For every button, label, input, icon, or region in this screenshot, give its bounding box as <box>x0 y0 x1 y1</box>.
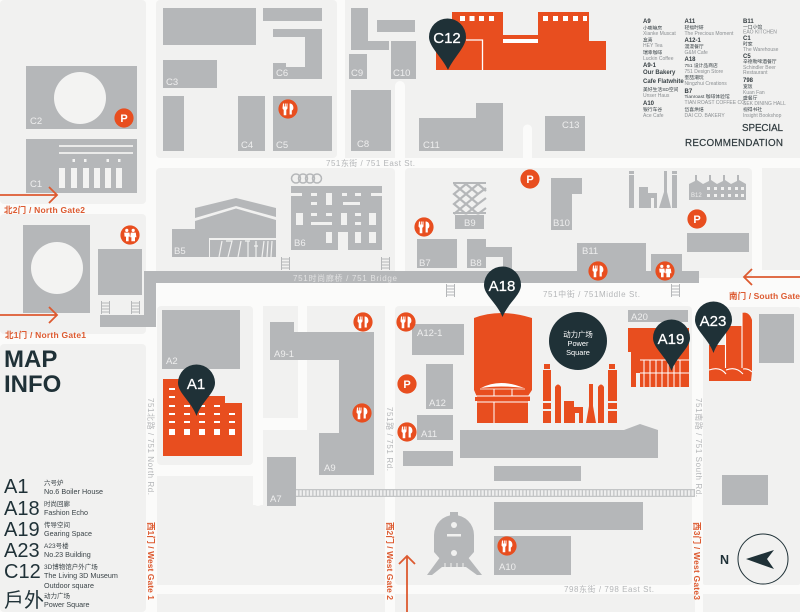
stairs <box>102 257 680 314</box>
pin: A23: A23 <box>700 313 726 330</box>
building C5: C5 <box>276 140 288 151</box>
east building <box>759 314 794 363</box>
column 2: A18 <box>684 57 696 63</box>
legend row A19: Gearing Space <box>44 529 92 538</box>
legend row A23: A23 <box>4 540 40 562</box>
column 2: 轻福时研 <box>684 24 704 31</box>
building C4 <box>238 96 265 151</box>
column 2: G&M Cafe <box>684 50 708 56</box>
column 2: 奎喆潮玩 <box>684 74 704 81</box>
column 3: The Warehouse <box>743 47 779 53</box>
legend row A1 <box>4 476 103 498</box>
building A11: A11 <box>421 429 437 440</box>
legend row outdoor: 动力广场 <box>44 591 70 600</box>
building with round court, north gate 1 <box>23 225 90 313</box>
grey chimneys <box>629 171 677 208</box>
long hall <box>460 424 658 458</box>
column 1: Luckin Coffee <box>643 56 674 62</box>
building C1: C1 <box>30 179 42 190</box>
building beside C3 <box>163 96 184 151</box>
legend row A18: A18 <box>4 498 40 520</box>
building low strip <box>403 451 453 466</box>
label: 751 South Rd: 751南路 / 751 South Rd. <box>694 398 704 497</box>
title: Map Info: MAP <box>4 346 57 373</box>
building B6 with rings: B6 <box>294 238 306 249</box>
Power Square circle: Square <box>566 348 590 357</box>
column 1: 银行车谷 <box>643 106 662 113</box>
column 3: EAO KITCHEN <box>743 30 777 36</box>
building C1 <box>26 139 137 193</box>
bridge: 751 Bridge walkway <box>100 271 699 327</box>
legend row A18: 时尚回廊 <box>44 499 70 508</box>
column 1: A9 <box>643 19 651 25</box>
highlighted building C12 <box>436 12 606 70</box>
legend row C12: 3D博物馆户外广场 <box>44 562 98 571</box>
gate: North Gate 1: 北1门 / North Gate1 <box>5 330 86 340</box>
building A20: A20 <box>631 312 648 323</box>
title: Map Info <box>4 346 61 398</box>
building A10 <box>494 536 571 575</box>
building B9 lattice tower: B9 <box>464 218 476 229</box>
gate: West Gate 1: 西1门 / West Gate 1 <box>146 522 156 600</box>
legend row A19: A19 <box>4 519 40 541</box>
building small strip <box>377 20 415 32</box>
panel: special recommendation list <box>643 19 786 149</box>
column 3: 宽饭 <box>743 83 753 90</box>
label: 751 Rd: 751路 / 751 Rd. <box>385 407 395 471</box>
building B10: B10 <box>553 218 570 229</box>
column 2: 751 设计品商店 <box>684 62 718 69</box>
building A9 and A9-1: A9 <box>324 463 336 474</box>
icon: parking A12: P <box>403 379 411 391</box>
building A7 <box>267 457 296 506</box>
legend row A23: No.23 Building <box>44 550 91 559</box>
building B11 <box>577 243 682 271</box>
building B6 with rings <box>291 174 382 250</box>
Power Square circle: Power <box>568 339 589 348</box>
column 2: The Precious Moment <box>684 31 734 37</box>
legend row A1: No.6 Boiler House <box>44 487 103 496</box>
legend row A23: A23号楼 <box>44 541 69 550</box>
legend row outdoor: 戶外 <box>4 589 44 612</box>
pin: A1: A1 <box>187 376 205 393</box>
column 3: 时家 <box>743 40 753 48</box>
column 1: A9-1 <box>643 63 657 69</box>
gate: West Gate 3: 西3门 / West Gate3 <box>692 522 702 600</box>
building C13 <box>545 116 585 151</box>
building A9 and A9-1 <box>270 322 374 475</box>
legend row C12 <box>4 561 118 590</box>
column 3: Insight Bookshop <box>743 113 782 119</box>
column 3: C1 <box>743 36 751 42</box>
building B8: B8 <box>470 258 482 269</box>
facility icons <box>114 99 707 556</box>
building B10 <box>551 178 582 230</box>
column 1: A10 <box>643 101 655 107</box>
building top left <box>163 8 256 45</box>
column 2: Ningzhui Creations <box>684 81 727 87</box>
building B5 with 751 art hall <box>172 198 276 257</box>
legend row A18 <box>4 498 88 520</box>
building C8 <box>351 90 391 151</box>
buildings: B zone <box>172 171 749 271</box>
compass: N <box>720 553 729 567</box>
pin: A23 <box>695 302 732 353</box>
highlighted building A18 <box>474 313 532 423</box>
building C8: C8 <box>357 139 369 150</box>
heading: special recommendation: SPECIAL <box>742 123 784 134</box>
buildings: A zone <box>162 310 794 575</box>
pin: A18: A18 <box>489 278 515 295</box>
legend row A18: Fashion Echo <box>44 508 88 517</box>
strip building <box>494 466 581 481</box>
building A9 and A9-1: A9-1 <box>274 349 294 360</box>
icon: restaurants <box>278 99 608 556</box>
building C3: C3 <box>166 77 178 88</box>
legend row C12: Outdoor square <box>44 581 94 590</box>
legend row A19 <box>4 519 92 541</box>
pin: A18 <box>484 266 521 317</box>
orange chimneys <box>543 364 617 423</box>
column 1: 盒喜 <box>643 36 653 44</box>
column 1: Xianke Muscat <box>643 31 676 37</box>
building A12 <box>426 364 453 409</box>
column 2 <box>684 19 746 119</box>
legend row C12: The Living 3D Museum <box>44 571 118 580</box>
icon: parking C2: P <box>120 113 128 125</box>
pin: A19: A19 <box>658 331 684 348</box>
road labels <box>146 158 704 594</box>
building A12-1 <box>412 324 464 355</box>
heading: special recommendation <box>685 123 784 149</box>
column 1: 小喇嘛房 <box>643 24 662 32</box>
building B8 <box>467 239 512 271</box>
building C6: C6 <box>276 68 288 79</box>
label: 751 East St: 751东街 / 751 East St. <box>326 158 415 168</box>
gate: West Gate 2 <box>385 522 415 612</box>
column 2: Tianroast 咖啡体验馆 <box>684 93 730 100</box>
highlighted building A19 <box>628 328 689 387</box>
Power Square circle <box>549 312 607 370</box>
column 3: Schindler Beer <box>743 65 776 71</box>
building C9 <box>349 54 367 79</box>
pin: C12: C12 <box>433 30 461 47</box>
building B5 with 751 art hall: B5 <box>174 246 186 257</box>
column 3 <box>743 19 786 119</box>
building B7: B7 <box>419 258 431 269</box>
column 3: 视得书社 <box>743 106 762 113</box>
column 2: DAI CO. BAKERY <box>684 113 725 119</box>
column 2: TIAN ROAST COFFEE CO. <box>684 100 746 106</box>
icon: restrooms <box>120 225 675 281</box>
building A12-1: A12-1 <box>417 328 442 339</box>
map pins <box>178 18 732 416</box>
building A10: A10 <box>499 562 516 573</box>
column 1: Cafe Flatwhite <box>643 79 684 85</box>
column 3: Kuan Fan <box>743 90 765 96</box>
column 3: 辛德勒啤酒餐厅 <box>743 58 777 65</box>
legend row C12: C12 <box>4 561 41 583</box>
locomotive <box>427 512 482 575</box>
legend row A19: 传导空间 <box>44 520 70 529</box>
column 1 <box>643 19 684 119</box>
column 1: Ace Cafe <box>643 113 664 119</box>
annex building <box>98 249 142 295</box>
building B12 sawtooth <box>689 175 746 200</box>
label: 751 Bridge: 751时尚廊桥 / 751 Bridge <box>293 273 398 283</box>
building A7: A7 <box>270 494 282 505</box>
column 1: HEY Tea <box>643 43 663 49</box>
column 3: 盛餐厅 <box>743 94 758 102</box>
column 3: C5 <box>743 54 751 60</box>
icon: parking B12 <box>687 209 707 229</box>
building top strip <box>263 8 322 21</box>
building C11: C11 <box>423 140 440 151</box>
column 3: Restaurant <box>743 70 768 76</box>
column 1: 瑞幸咖啡 <box>643 49 662 56</box>
building C10: C10 <box>393 68 410 79</box>
building C5 <box>273 96 332 151</box>
icon: parking C2 <box>114 108 134 128</box>
legend row A1: 六号炉 <box>44 478 64 487</box>
title: Map Info: INFO <box>4 371 61 398</box>
column 3: 一口小馆 <box>743 24 762 30</box>
building C10 <box>391 41 416 79</box>
gate: South Gate <box>729 269 800 301</box>
legend: highlighted sites <box>4 476 118 612</box>
building B9 lattice tower <box>453 183 486 229</box>
building B12 sawtooth: B12 <box>691 193 702 199</box>
column 2: 751 Design Store <box>684 69 723 75</box>
gate: North Gate 2 <box>0 187 85 215</box>
column 3: 798 <box>743 78 754 84</box>
building east strip <box>687 233 749 252</box>
column 2: 岱喜烘焙 <box>684 106 704 113</box>
building A20 <box>628 310 688 323</box>
label: 751 North Rd: 751北路 / 751 North Rd. <box>146 398 156 495</box>
building C4: C4 <box>241 140 253 151</box>
label: 798 East St: 798东街 / 798 East St. <box>564 584 654 594</box>
pin: A1 <box>178 364 215 416</box>
icon: parking B zone <box>520 169 540 189</box>
gate: South Gate: 南门 / South Gate <box>729 291 800 301</box>
building C3 <box>163 60 217 88</box>
column 2: A12-1 <box>684 38 702 44</box>
column 2: A11 <box>684 19 696 25</box>
legend row A23 <box>4 540 91 562</box>
building C2: C2 <box>30 116 42 127</box>
column 1: 美好生活SD空间 <box>643 86 679 93</box>
building C2 <box>26 66 137 129</box>
compass <box>720 534 788 584</box>
building C11 <box>419 103 503 151</box>
pin: C12 <box>429 18 466 70</box>
buildings: C zone <box>23 8 585 313</box>
label: 751 Middle St: 751中街 / 751Middle St. <box>543 289 640 299</box>
building C9: C9 <box>351 68 363 79</box>
column 2: 漫漫餐厅 <box>684 43 704 50</box>
legend row outdoor <box>4 589 90 612</box>
column 3: SEK DINING HALL <box>743 101 786 107</box>
legend row A1: A1 <box>4 476 28 498</box>
building C6 <box>273 29 322 79</box>
legend row outdoor: Power Square <box>44 600 90 609</box>
gates <box>0 187 800 612</box>
highlighted building A23 <box>709 313 752 381</box>
icon: parking B12: P <box>693 214 701 226</box>
pin: A19 <box>653 320 690 371</box>
column 1: Unser Haus <box>643 93 670 99</box>
column 2: B7 <box>684 89 693 95</box>
building A2: A2 <box>166 356 178 367</box>
building C13: C13 <box>562 120 579 131</box>
rail track <box>296 489 695 497</box>
east small building <box>722 475 768 505</box>
Power Square circle: 动力广场 <box>563 330 593 339</box>
gate: West Gate 2: 西2门 / West Gate 2 <box>385 522 395 600</box>
heading: special recommendation: RECOMMENDATION <box>685 138 783 149</box>
building B7 <box>417 239 457 269</box>
gate: North Gate 1 <box>0 307 86 340</box>
road: white dead-end fix <box>253 300 307 506</box>
building A12: A12 <box>429 398 446 409</box>
long building <box>494 502 643 530</box>
building A2 <box>162 310 240 369</box>
highlighted building A1 <box>163 379 242 456</box>
building B11: B11 <box>582 246 598 257</box>
icon: parking A12 <box>397 374 417 394</box>
icon: parking B zone: P <box>526 174 534 186</box>
gate: North Gate 2: 北2门 / North Gate2 <box>4 205 85 215</box>
column 3: B11 <box>743 19 754 25</box>
building upper L <box>351 8 389 50</box>
building A11 <box>417 415 453 440</box>
column 1: Our Bakery <box>643 70 676 76</box>
